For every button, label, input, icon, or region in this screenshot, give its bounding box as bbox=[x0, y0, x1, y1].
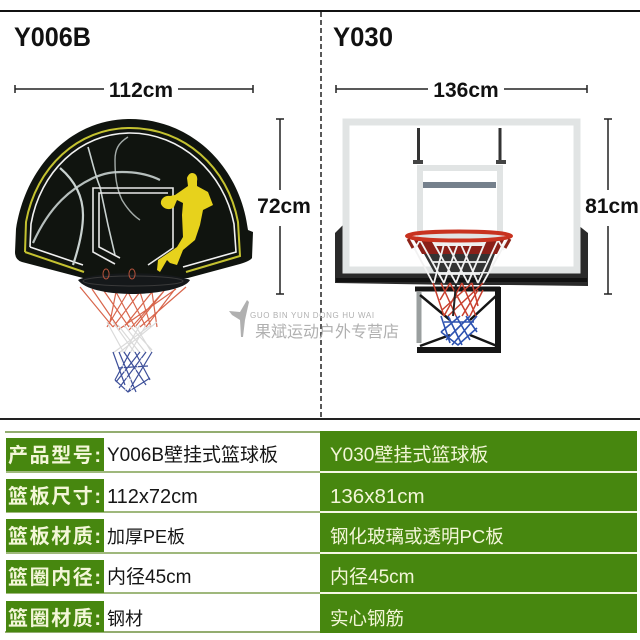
heading: Y030: Y030 bbox=[333, 22, 393, 52]
heading: Y006B: Y006B bbox=[14, 22, 91, 52]
row: size Y030: 136x81cm bbox=[330, 485, 425, 508]
row: model label bbox=[6, 438, 104, 471]
row: size Y006B: 112x72cm bbox=[107, 486, 198, 508]
right column green background bbox=[320, 431, 637, 633]
row: board material label bbox=[6, 519, 104, 552]
row: board material label: 篮板材质: bbox=[8, 526, 103, 548]
dimension: height 72cm: 72cm bbox=[257, 195, 311, 218]
row: board material Y006B: 加厚PE板 bbox=[107, 527, 185, 547]
row: rim material label: 篮圈材质: bbox=[8, 608, 103, 630]
row: rim material label bbox=[6, 601, 104, 632]
table: product comparison bbox=[5, 431, 637, 633]
icon: watermark figure bbox=[229, 300, 249, 337]
watermark: GUO BIN YUN DONG HU WAI bbox=[250, 311, 375, 320]
row: rim diameter Y030: 内径45cm bbox=[330, 567, 414, 588]
dimension: width 112cm bbox=[15, 79, 253, 102]
row: model Y006B: Y006B壁挂式篮球板 bbox=[107, 445, 278, 466]
row: rim diameter Y006B: 内径45cm bbox=[107, 567, 191, 588]
watermark bbox=[229, 300, 399, 341]
dimension: height 72cm bbox=[257, 119, 311, 294]
dimension: height 81cm: 81cm bbox=[585, 195, 639, 218]
dimension: width 136cm bbox=[336, 79, 587, 102]
hoop and net Y030 bbox=[407, 232, 511, 345]
row: size label bbox=[6, 479, 104, 512]
dimension: width 136cm: 136cm bbox=[433, 79, 499, 102]
row: rim diameter label bbox=[6, 560, 104, 593]
row: board material Y030: 钢化玻璃或透明PC板 bbox=[330, 526, 504, 547]
bracket behind glass bbox=[413, 128, 506, 236]
watermark: 果斌运动户外专营店 bbox=[255, 323, 399, 341]
row: model Y030: Y030壁挂式篮球板 bbox=[330, 445, 488, 466]
row: model label: 产品型号: bbox=[8, 445, 103, 467]
mount frame Y030 bbox=[415, 287, 500, 350]
row: rim diameter label: 篮圈内径: bbox=[8, 567, 103, 589]
backboard Y030 bbox=[335, 122, 588, 286]
hoop and net Y006B bbox=[78, 269, 190, 392]
dimension: height 81cm bbox=[585, 119, 639, 294]
backboard Y006B bbox=[15, 119, 253, 278]
icon: yellow player silhouette bbox=[157, 173, 213, 272]
dimension: width 112cm: 112cm bbox=[109, 79, 173, 102]
row: size label: 篮板尺寸: bbox=[8, 486, 103, 508]
row: rim material Y006B: 钢材 bbox=[107, 609, 143, 629]
row: rim material Y030: 实心钢筋 bbox=[330, 608, 404, 629]
